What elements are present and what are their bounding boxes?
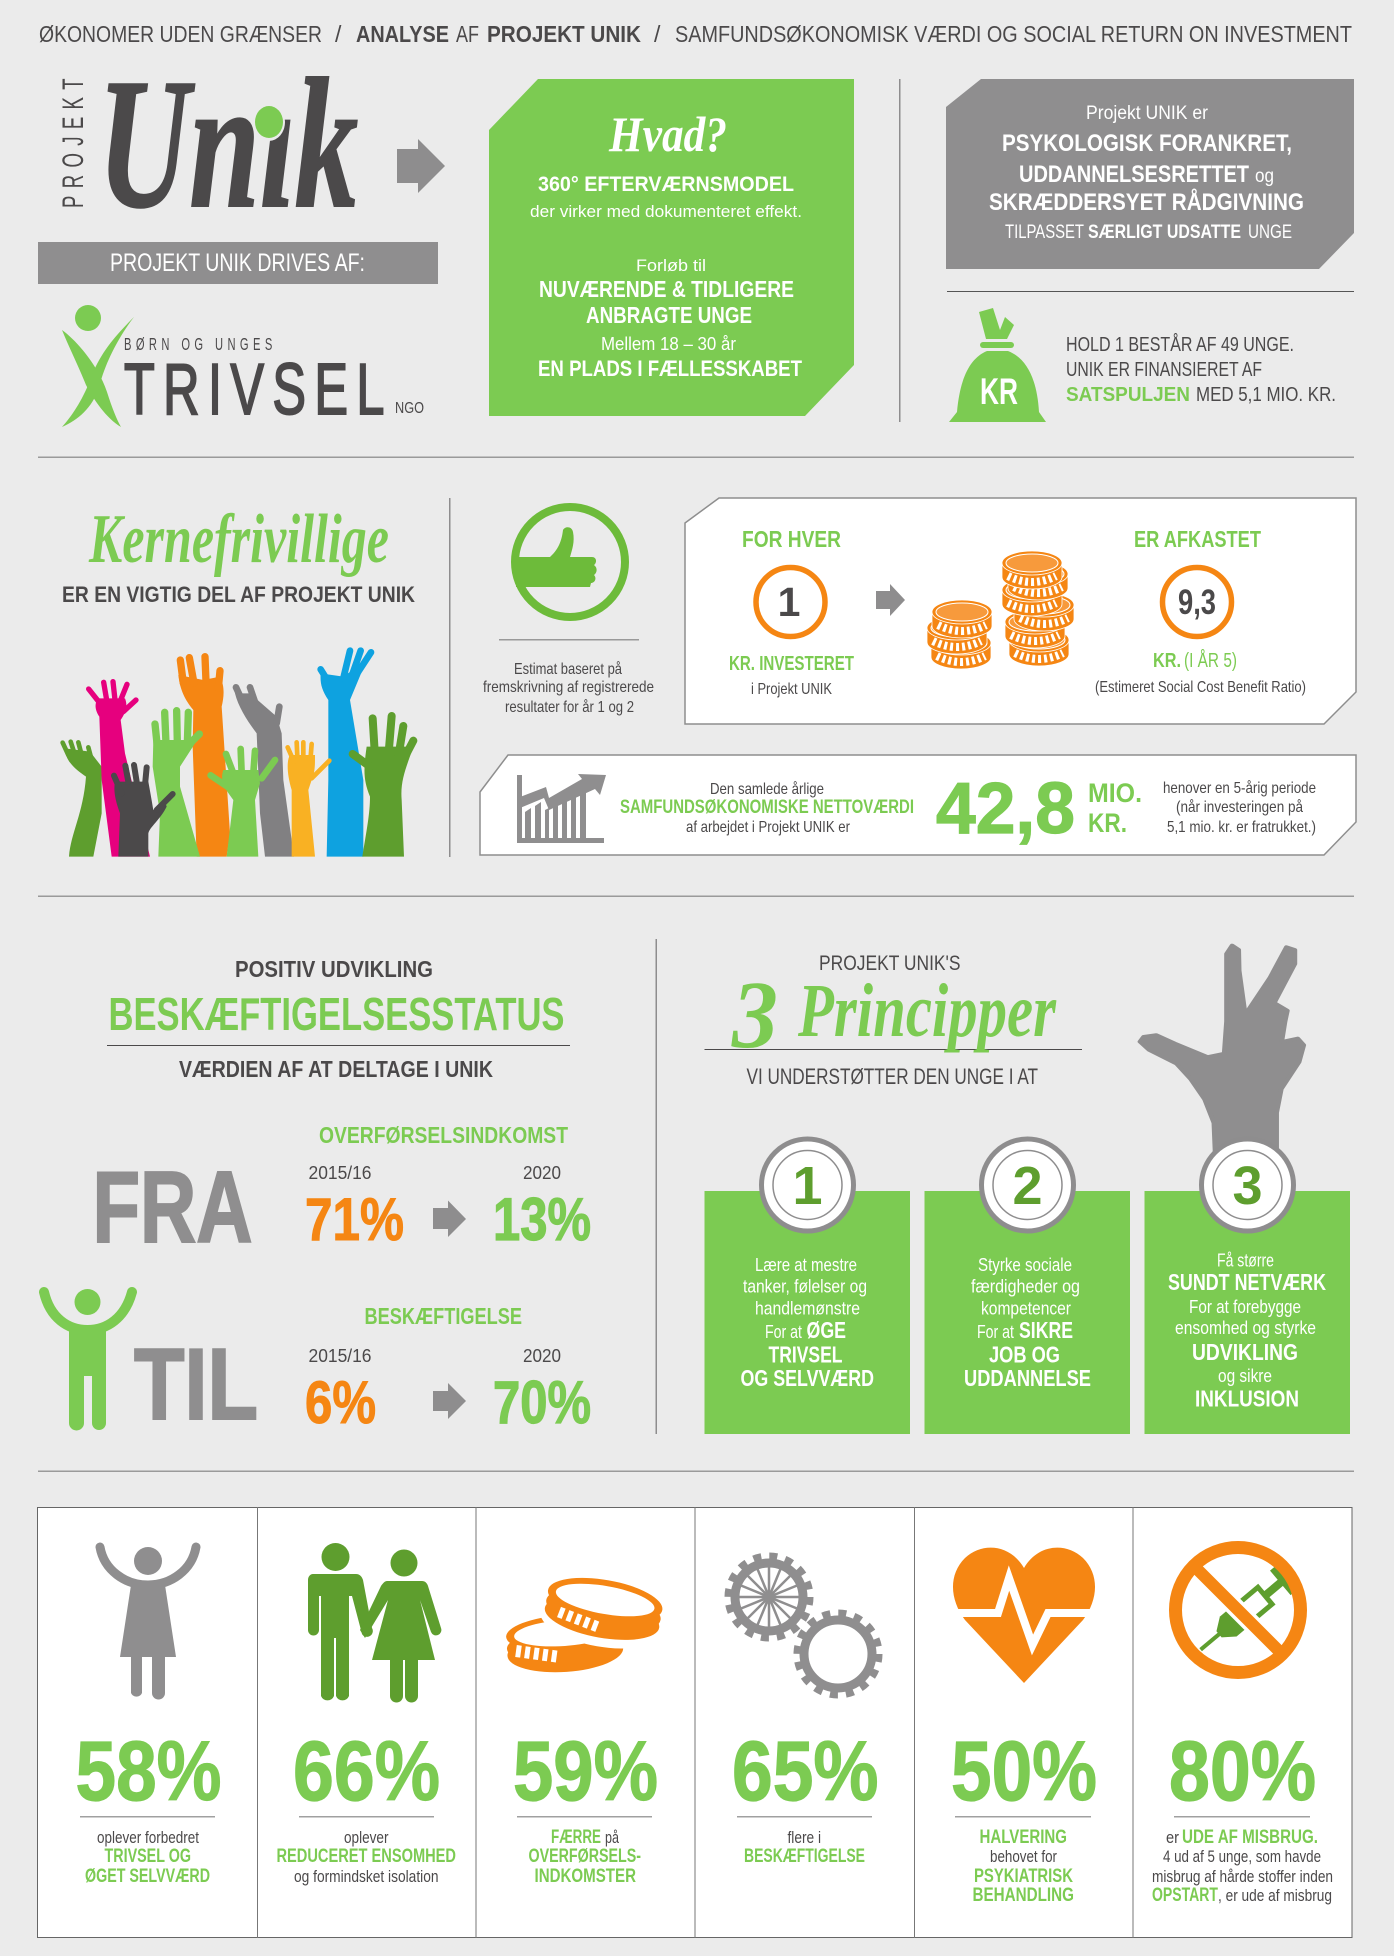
column: 59%: på	[605, 1828, 619, 1847]
column: 59%: FÆRRE	[551, 1827, 601, 1848]
panel: principle 1: TRIVSEL	[768, 1342, 842, 1368]
logo: Børn og Unges Trivsel: NGO	[395, 400, 424, 417]
panel: Projekt UNIK er: SKRÆDDERSYET RÅDGIVNING	[989, 188, 1304, 216]
panel: principle 3: SUNDT NETVÆRK	[1168, 1269, 1326, 1295]
panel: samlet nettoværdi	[480, 755, 1356, 855]
panel: Hvad?: 360° EFTERVÆRNSMODEL	[538, 173, 794, 196]
column: 50%: PSYKIATRISK	[974, 1866, 1073, 1887]
panel: samlet nettoværdi: SAMFUNDSØKONOMISKE NETTOVÆRDI	[620, 797, 914, 818]
panel: return on investment: KR.	[1153, 650, 1181, 672]
column: 66%: REDUCERET ENSOMHED	[276, 1846, 456, 1867]
column: 59%: OVERFØRSELS-	[528, 1846, 641, 1867]
panel: Hvad?: ANBRAGTE UNGE	[586, 302, 752, 328]
text: estimat note: fremskrivning af registrerede	[483, 679, 654, 696]
column: 58%: ØGET SELVVÆRD	[85, 1866, 210, 1887]
logo: Projekt Unik	[57, 41, 358, 247]
stat: overførselsindkomst: FRA	[92, 1152, 252, 1264]
panel: principle 2: SIKRE	[1019, 1317, 1073, 1343]
panel: Hvad?: Mellem 18 – 30 år	[601, 334, 736, 354]
column: 66%: oplever	[344, 1828, 389, 1847]
header line: AF	[456, 21, 479, 47]
column: 66%: 66%	[293, 1724, 440, 1818]
column: 80%: er	[1166, 1828, 1179, 1847]
icon: money bag: KR	[980, 371, 1018, 412]
column: 58%: oplever forbedret	[97, 1828, 199, 1847]
heading: Kernefrivillige	[62, 501, 415, 607]
text: funding: MED 5,1 MIO. KR.	[1196, 383, 1336, 406]
column: 80%: 4 ud af 5 unge, som havde	[1163, 1847, 1321, 1866]
stat: beskæftigelse: 70%	[493, 1369, 591, 1436]
column: 66%: og formindsket isolation	[294, 1867, 438, 1886]
column: 59%: INDKOMSTER	[534, 1866, 636, 1887]
column: 65%	[728, 1556, 879, 1867]
heading: 3 principper: 3	[731, 961, 778, 1068]
panel: principle 3: INKLUSION	[1195, 1386, 1299, 1412]
logo: Børn og Unges Trivsel	[62, 305, 424, 430]
panel: return on investment: (Estimeret Social Cost Benefit Ratio)	[1095, 679, 1306, 696]
header line	[39, 21, 1352, 47]
logo: Børn og Unges Trivsel: TRIVSEL	[124, 350, 393, 430]
heading: 3 principper: PROJEKT UNIK'S	[819, 952, 960, 975]
column: 58%: TRIVSEL OG	[104, 1846, 191, 1867]
icon: green person	[44, 1289, 132, 1430]
icon: thumbs up	[515, 507, 625, 617]
banner: drives af: PROJEKT UNIK DRIVES AF:	[110, 249, 365, 277]
panel: principle 3: 3	[1232, 1156, 1263, 1216]
panel: principle 2: Styrke sociale	[978, 1255, 1072, 1275]
panel: principle 1: handlemønstre	[755, 1298, 860, 1318]
panel: samlet nettoværdi: Den samlede årlige	[710, 780, 824, 798]
header line: /	[654, 21, 661, 47]
illustration: raised hands	[63, 651, 413, 857]
heading: beskæftigelsesstatus: BESKÆFTIGELSESSTATUS	[108, 988, 564, 1040]
column: 80%: OPSTART	[1152, 1885, 1218, 1906]
column: 65%: flere i	[788, 1828, 821, 1847]
column: 50%: 50%	[951, 1724, 1097, 1818]
panel: principle 3: og sikre	[1218, 1366, 1272, 1386]
panel: Hvad?: Forløb til	[636, 256, 706, 275]
panel: principle 2: kompetencer	[981, 1298, 1071, 1318]
column: 80%: UDE AF MISBRUG.	[1182, 1827, 1318, 1848]
arrow	[397, 139, 445, 193]
heading: beskæftigelsesstatus: POSITIV UDVIKLING	[235, 956, 433, 982]
panel: principle 1: For at	[765, 1322, 802, 1342]
header line: /	[335, 21, 342, 47]
panel: principle 3: ensomhed og styrke	[1175, 1318, 1316, 1338]
panel: return on investment: i Projekt UNIK	[751, 681, 832, 698]
panel: principle 3: UDVIKLING	[1192, 1339, 1298, 1365]
panel: return on investment	[685, 498, 1356, 724]
header line: ØKONOMER UDEN GRÆNSER	[39, 21, 322, 47]
panel: return on investment: 1	[778, 579, 800, 625]
stat: beskæftigelse: 2020	[523, 1346, 561, 1366]
stat: overførselsindkomst: 13%	[493, 1186, 591, 1253]
stat: overførselsindkomst	[92, 1122, 591, 1264]
heading: 3 principper	[704, 952, 1082, 1089]
heading: beskæftigelsesstatus: VÆRDIEN AF AT DELTAGE I UNIK	[179, 1056, 493, 1082]
panel: Projekt UNIK er: SÆRLIGT UDSATTE	[1088, 222, 1241, 243]
text: estimat note: Estimat baseret på	[514, 660, 622, 678]
stat: beskæftigelse: BESKÆFTIGELSE	[364, 1303, 522, 1329]
panel: Hvad?: EN PLADS I FÆLLESSKABET	[538, 356, 802, 381]
stat: beskæftigelse: 2015/16	[308, 1346, 372, 1366]
heading: 3 principper: VI UNDERSTØTTER DEN UNGE I AT	[746, 1064, 1038, 1089]
stat: beskæftigelse: TIL	[134, 1329, 258, 1441]
panel: principle 3: Få større	[1217, 1250, 1274, 1270]
panel: samlet nettoværdi: 42,8	[936, 769, 1075, 849]
panel: Projekt UNIK er: UNGE	[1248, 222, 1292, 243]
panel: samlet nettoværdi: af arbejdet i Projekt UNIK er	[686, 819, 851, 836]
header line: ANALYSE	[356, 21, 449, 47]
text: funding: SATSPULJEN	[1066, 383, 1190, 406]
column: 65%: 65%	[732, 1724, 878, 1818]
panel: principle 2: færdigheder og	[971, 1276, 1080, 1296]
text: estimat note: resultater for år 1 og 2	[505, 698, 634, 716]
stat: overførselsindkomst: 2015/16	[308, 1163, 372, 1183]
panel: principle 1: Lære at mestre	[755, 1255, 857, 1275]
logo: Projekt Unik: PROJEKT	[57, 71, 90, 208]
panel: Projekt UNIK er: og	[1255, 166, 1274, 187]
panel: principle 2: JOB OG	[989, 1342, 1060, 1368]
column: 59%	[505, 1566, 670, 1887]
column: 65%: BESKÆFTIGELSE	[744, 1846, 865, 1867]
panel: samlet nettoværdi: 5,1 mio. kr. er fratrukket.)	[1167, 819, 1316, 836]
panel: principle 1: 1	[792, 1156, 823, 1216]
heading: 3 principper: Principper	[797, 969, 1057, 1053]
panel: samlet nettoværdi: (når investeringen på	[1176, 798, 1303, 816]
panel: return on investment: FOR HVER	[742, 526, 841, 552]
heading: Kernefrivillige: ER EN VIGTIG DEL AF PROJEKT UNIK	[62, 582, 415, 607]
panel: Hvad?: Hvad?	[608, 106, 727, 162]
icon: money bag	[949, 308, 1046, 422]
text: funding: UNIK ER FINANSIERET AF	[1066, 358, 1262, 381]
panel: principle 1: OG SELVVÆRD	[740, 1365, 874, 1391]
panel: Hvad?: der virker med dokumenteret effekt.	[530, 202, 802, 221]
column: 58%: 58%	[76, 1724, 222, 1818]
column: 80%: 80%	[1169, 1724, 1316, 1818]
panel: samlet nettoværdi: MIO.	[1088, 778, 1142, 808]
logo: Projekt Unik: Unik	[98, 41, 358, 247]
heading: Kernefrivillige: Kernefrivillige	[88, 501, 389, 578]
column: 50%: HALVERING	[980, 1827, 1067, 1848]
column: 80%: misbrug af hårde stoffer inden	[1152, 1867, 1333, 1886]
column: 50%	[948, 1548, 1100, 1906]
text: estimat note	[483, 660, 654, 716]
panel: principle 2: For at	[977, 1322, 1014, 1342]
column: 66%	[276, 1543, 456, 1886]
panel: Hvad?	[489, 79, 854, 416]
panel: Hvad?: NUVÆRENDE & TIDLIGERE	[539, 276, 794, 302]
stat: overførselsindkomst: OVERFØRSELSINDKOMST	[319, 1122, 568, 1148]
panel: principle 1: ØGE	[806, 1317, 846, 1343]
header line: PROJEKT UNIK	[487, 21, 641, 47]
panel: Projekt UNIK er: TILPASSET	[1005, 222, 1084, 243]
column: 80%: , er ude af misbrug	[1218, 1886, 1332, 1905]
panel: Projekt UNIK er: UDDANNELSESRETTET	[1019, 161, 1249, 188]
panel: Projekt UNIK er	[946, 79, 1354, 269]
panel: samlet nettoværdi: KR.	[1088, 808, 1127, 838]
text: funding: HOLD 1 BESTÅR AF 49 UNGE.	[1066, 333, 1294, 356]
panel: samlet nettoværdi: henover en 5-årig periode	[1163, 779, 1316, 797]
panel: return on investment: KR. INVESTERET	[729, 653, 854, 675]
column: 50%: behovet for	[990, 1847, 1057, 1866]
panel: Projekt UNIK er: Projekt UNIK er	[1086, 103, 1209, 124]
column: 58%	[76, 1547, 222, 1887]
stat: beskæftigelse	[134, 1303, 591, 1441]
panel: principle 2: 2	[1012, 1156, 1043, 1216]
column: 80%	[1152, 1548, 1333, 1906]
panel: principle 1: tanker, følelser og	[743, 1276, 867, 1296]
panel: return on investment: (I ÅR 5)	[1184, 649, 1237, 672]
stat: beskæftigelse: 6%	[305, 1369, 376, 1436]
panel: return on investment: 9,3	[1178, 583, 1216, 622]
panel: principle 3: For at forebygge	[1189, 1297, 1301, 1317]
column: 59%: 59%	[513, 1724, 658, 1818]
column: 50%: BEHANDLING	[972, 1885, 1074, 1906]
panel: results table background	[38, 1508, 1352, 1938]
stat: overførselsindkomst: 2020	[523, 1163, 561, 1183]
panel: principle 2	[924, 1139, 1130, 1434]
banner: drives af	[38, 242, 438, 284]
panel: principle 1	[704, 1139, 910, 1434]
panel: principle 3	[1144, 1139, 1350, 1434]
logo: Børn og Unges Trivsel: BØRN OG UNGES	[124, 334, 277, 355]
text: funding	[1066, 333, 1336, 406]
panel: return on investment: ER AFKASTET	[1134, 526, 1261, 552]
stat: overførselsindkomst: 71%	[305, 1186, 404, 1253]
panel: Projekt UNIK er: PSYKOLOGISK FORANKRET,	[1002, 130, 1292, 157]
illustration: hand showing three	[1140, 945, 1304, 1157]
heading: beskæftigelsesstatus	[107, 956, 570, 1082]
panel: principle 2: UDDANNELSE	[964, 1365, 1091, 1391]
